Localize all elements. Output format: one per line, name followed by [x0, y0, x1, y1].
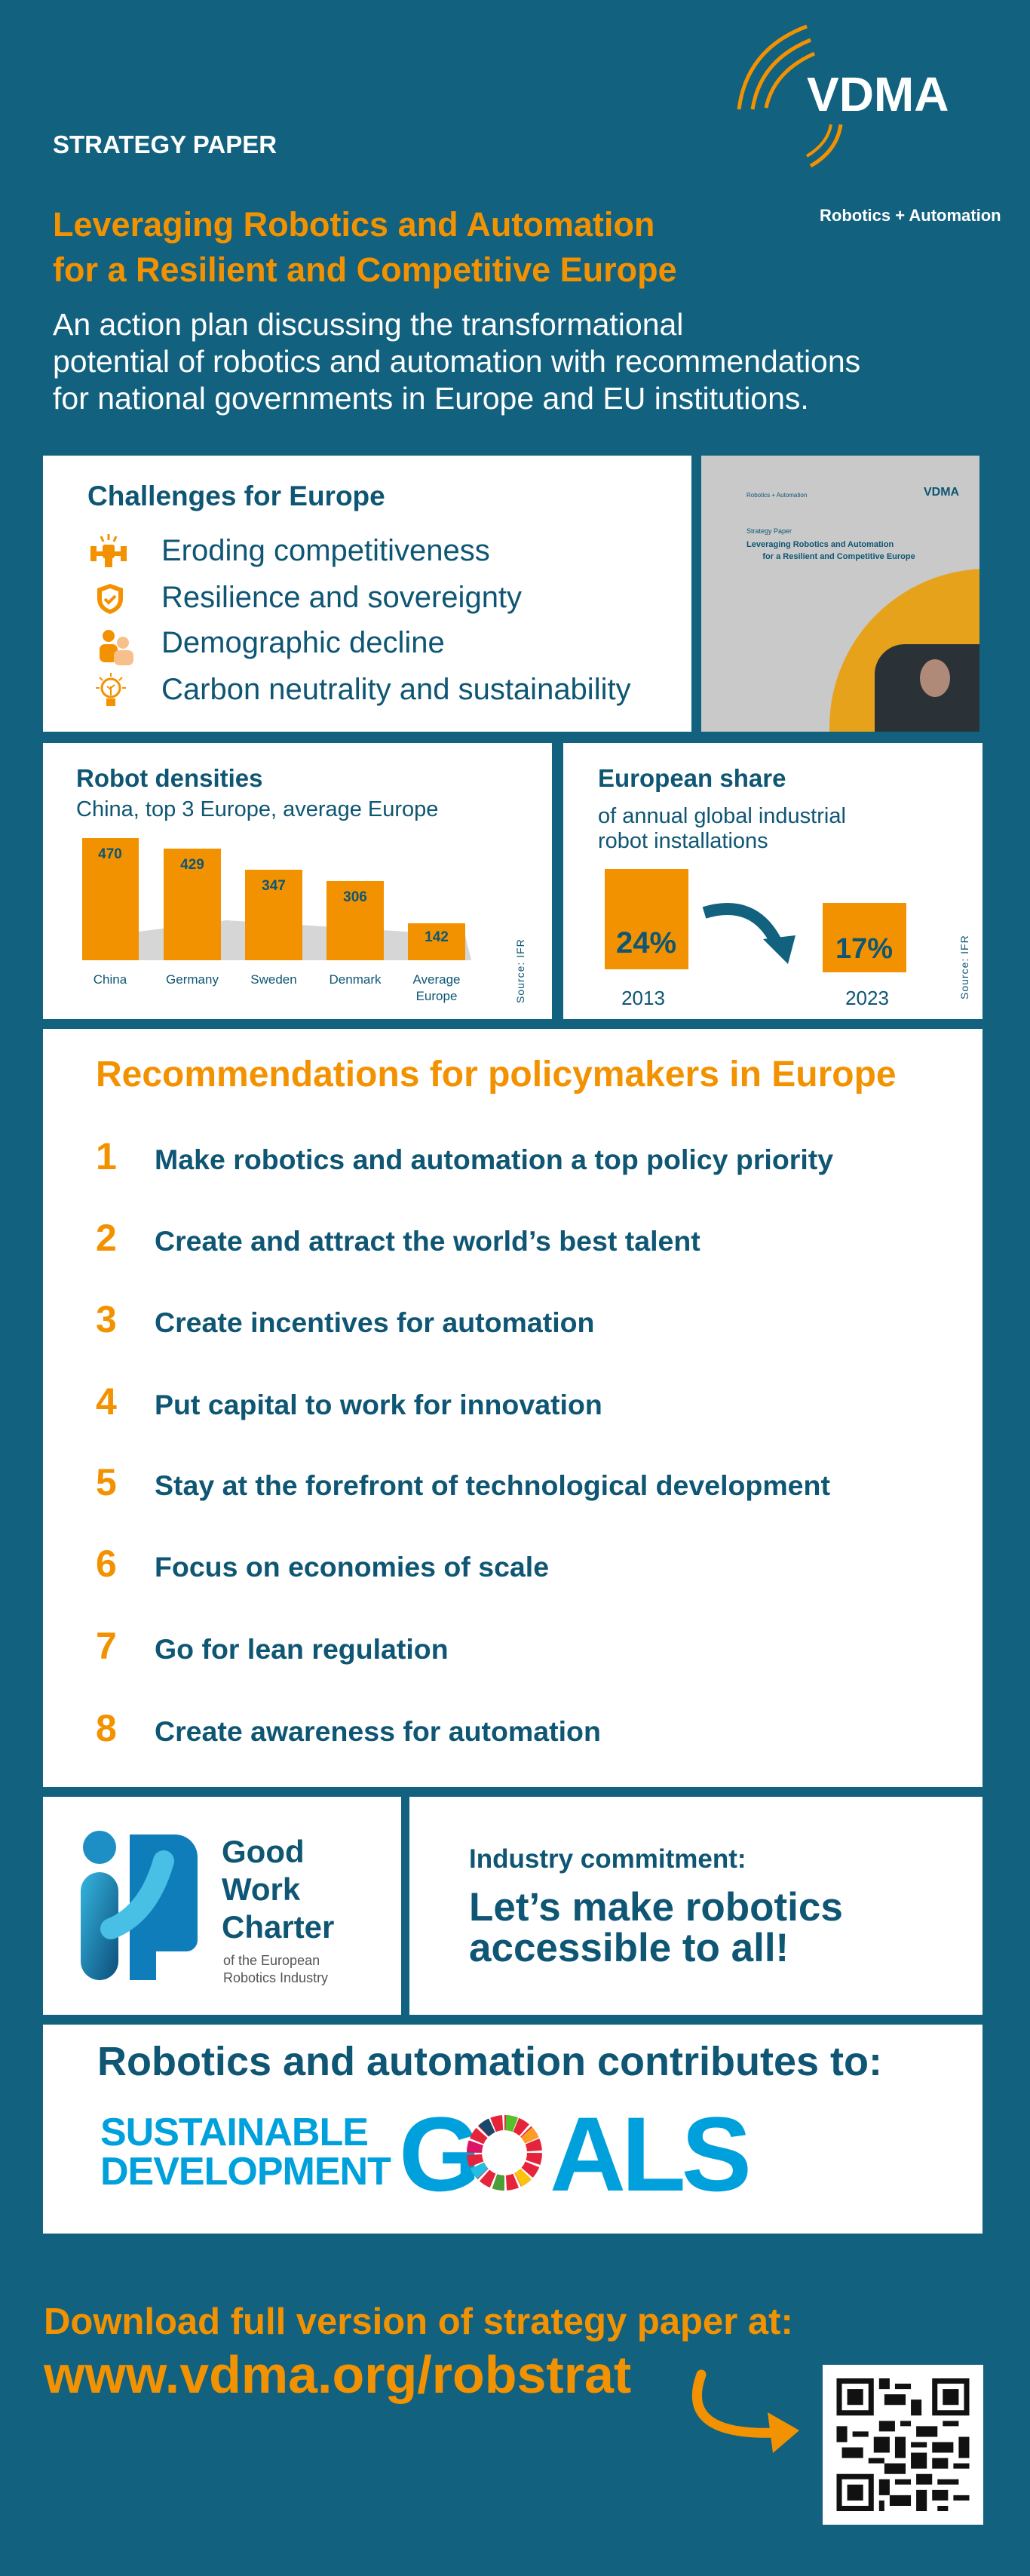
image: cover of strategy paper [701, 456, 979, 732]
text: good work charter: Good [222, 1834, 305, 1869]
bar chart: robot densities: Denmark [330, 972, 382, 987]
list: recommendations: 6 [96, 1543, 117, 1585]
bar chart: robot densities: China [93, 972, 127, 987]
logo: VDMA: VDMA [807, 67, 949, 121]
list: recommendations: Make robotics and automation a top policy priority [155, 1144, 833, 1175]
text: url: www.vdma.org/robstrat [44, 2345, 631, 2404]
logo: SDG: ALS [550, 2095, 747, 2213]
subheading: of annual global industrial [598, 804, 846, 828]
list: recommendations: 2 [96, 1217, 117, 1259]
logo: SDG [100, 2095, 748, 2213]
chart: share bars and arrow: 24% [616, 926, 676, 959]
text: good work charter [222, 1834, 334, 1945]
bar chart: robot densities: Sweden [250, 972, 297, 987]
panel: good work charter: Robotics Industry [223, 1970, 328, 1985]
list: recommendations: Create incentives for automation [155, 1306, 594, 1338]
bar chart: robot densities: 429 [180, 857, 204, 873]
logo: VDMA [737, 24, 949, 167]
text: resilience: Resilience and sovereignty [161, 581, 522, 614]
text: good work charter: Charter [222, 1909, 334, 1945]
slogan: accessible to all! [469, 1926, 789, 1970]
title: Leveraging Robotics and Automation [53, 205, 654, 244]
list: recommendations: 1 [96, 1135, 117, 1177]
icon: bulb [96, 673, 126, 706]
subheading: robot installations [598, 829, 768, 853]
logo: SDG: G [399, 2095, 481, 2213]
chart: share bars and arrow: 2013 [621, 987, 665, 1009]
list: recommendations: Create and attract the world’s best talent [155, 1225, 700, 1257]
bar chart: robot densities: 142 [425, 929, 449, 945]
list: recommendations: 4 [96, 1380, 117, 1423]
heading: european share: European share [598, 764, 786, 792]
heading: robot densities: Robot densities [76, 764, 263, 792]
panel: good work charter [43, 1797, 401, 2015]
heading: recommendations: Recommendations for policymakers in Europe [96, 1055, 897, 1095]
QR code [823, 2365, 983, 2525]
slogan: Let’s make robotics [469, 1885, 843, 1930]
panel: challenges [43, 456, 691, 732]
list: recommendations: Focus on economies of scale [155, 1551, 549, 1583]
panel: industry commitment [409, 1797, 982, 2015]
text: demographic: Demographic decline [161, 626, 445, 659]
image: cover of strategy paper: Strategy Paper [746, 527, 792, 535]
logo: SDG: DEVELOPMENT [100, 2150, 391, 2194]
image: cover of strategy paper: for a Resilient and Competitive Europe [762, 552, 915, 561]
panel: european share [563, 743, 982, 1019]
subheading: China, top 3 Europe, average Europe [76, 797, 438, 821]
list: recommendations: 8 [96, 1707, 117, 1749]
icon: shield [97, 584, 123, 614]
list: recommendations: 7 [96, 1625, 117, 1667]
icon: competitiveness [90, 534, 127, 567]
panel: recommendations [43, 1029, 982, 1787]
text: eroding competitiveness: Eroding competitiveness [161, 534, 490, 567]
list: recommendations: 3 [96, 1298, 117, 1340]
chart: share bars and arrow [605, 869, 970, 1009]
list: recommendations: Stay at the forefront of technological development [155, 1469, 830, 1501]
text: good work charter: Work [222, 1871, 300, 1907]
title [53, 205, 677, 289]
icon: people [100, 630, 133, 665]
chart: share bars and arrow: 17% [835, 933, 893, 965]
logo: SDG: SUSTAINABLE [100, 2111, 368, 2154]
bar chart: robot densities: 347 [262, 878, 286, 894]
list: recommendations: Create awareness for automation [155, 1715, 601, 1747]
panel: robot densities [43, 743, 552, 1019]
bar chart: robot densities: 306 [343, 889, 367, 905]
slogan [469, 1885, 843, 1970]
image: cover of strategy paper: VDMA [924, 486, 959, 499]
list: recommendations: Put capital to work for innovation [155, 1389, 602, 1420]
list: recommendations: 5 [96, 1461, 117, 1503]
panel: good work charter: of the European [223, 1953, 320, 1968]
bar chart: robot densities: Germany [166, 972, 219, 987]
text: industry commitment: Industry commitment: [469, 1844, 746, 1874]
bar chart: robot densities: Europe [416, 989, 457, 1003]
intro text: An action plan discussing the transformational [53, 307, 683, 342]
icon: good work charter logo [81, 1831, 198, 1980]
bar chart: robot densities: 470 [98, 846, 122, 862]
label: strategy paper: STRATEGY PAPER [53, 130, 277, 158]
intro text: for national governments in Europe and EU institutions. [53, 381, 809, 416]
list: recommendations [96, 1135, 833, 1749]
chart: share bars and arrow: 2023 [845, 987, 889, 1009]
intro text [53, 307, 860, 416]
image: cover of strategy paper: Robotics + Automation [746, 492, 807, 499]
list: recommendations: Go for lean regulation [155, 1633, 449, 1665]
image: cover of strategy paper: Leveraging Robotics and Automation [746, 540, 894, 549]
heading: contributes to: Robotics and automation contributes to: [97, 2039, 882, 2084]
subheading [598, 804, 846, 853]
title: for a Resilient and Competitive Europe [53, 250, 677, 289]
text: download: Download full version of strategy paper at: [44, 2301, 793, 2342]
chart: share bars and arrow: Source: IFR [958, 935, 970, 999]
intro text: potential of robotics and automation with recommendations [53, 344, 860, 379]
heading: challenges: Challenges for Europe [87, 481, 385, 511]
bar chart: robot densities [82, 838, 526, 1003]
arrow: to QR [692, 2370, 799, 2453]
text: carbon: Carbon neutrality and sustainability [161, 673, 631, 706]
bar chart: robot densities: Average [412, 972, 461, 987]
panel: sustainable development goals [43, 2025, 982, 2234]
subtitle: Robotics + Automation: Robotics + Automation [820, 206, 1001, 225]
